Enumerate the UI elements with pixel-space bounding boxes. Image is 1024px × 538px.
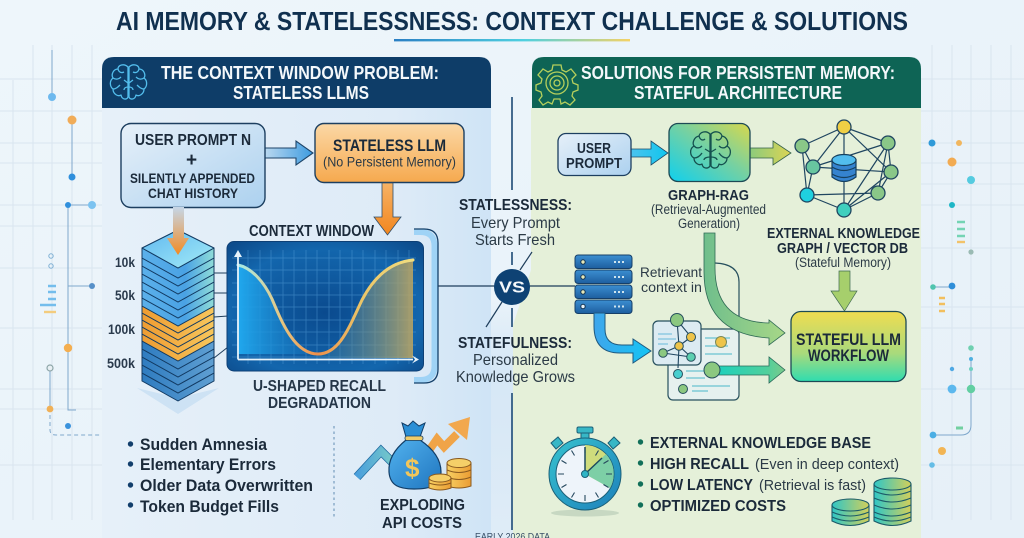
vs badge: VS	[499, 280, 525, 296]
diagram: knowledge graph	[795, 120, 898, 217]
token scale labels: 10k	[115, 255, 135, 270]
icon: database	[832, 154, 856, 182]
token scale labels: 500k	[107, 356, 135, 371]
text: statefulness	[456, 335, 575, 386]
token scale labels: 100k	[108, 322, 135, 337]
text: statelessness: Starts Fresh	[475, 232, 555, 249]
token scale labels: 50k	[115, 288, 135, 303]
box: user prompt	[558, 134, 631, 176]
box: user prompt: +	[186, 150, 197, 171]
box: stateful LLM workflow	[791, 312, 906, 382]
text: graph-rag: Generation)	[678, 216, 740, 231]
text: retrievant context: context in	[641, 279, 702, 295]
arrow: prompt to graph-rag	[631, 141, 668, 165]
heading: U-shaped recall degradation: U-SHAPED RECALL	[253, 378, 386, 395]
text: graph-rag: (Retrieval-Augmented	[651, 202, 766, 217]
arrow: graph-rag to workflow	[704, 233, 785, 345]
list: stateless symptoms: Elementary Errors	[140, 456, 276, 474]
box: user prompt	[121, 124, 265, 208]
icon: gear	[536, 65, 578, 105]
heading: U-shaped recall degradation	[253, 378, 386, 412]
box: user prompt: PROMPT	[566, 156, 622, 172]
icon: money bag and rising cost	[357, 417, 471, 490]
vs badge	[494, 269, 530, 305]
box: stateless LLM: (No Persistent Memory)	[323, 154, 456, 170]
arrow: server to documents	[594, 313, 651, 363]
text: graph-rag: GRAPH-RAG	[668, 187, 749, 204]
heading: context window: CONTEXT WINDOW	[249, 223, 374, 240]
chart: U-shaped recall	[227, 242, 424, 371]
list: stateless symptoms: Older Data Overwritten	[140, 477, 313, 495]
box: user prompt: USER PROMPT N	[135, 132, 251, 149]
arrow: prompt into token stack	[167, 207, 189, 255]
list: stateful benefits: (Even in deep context)	[755, 456, 899, 473]
icon: money bag and rising cost: $	[405, 453, 420, 483]
icon: stopwatch	[549, 427, 621, 516]
list: stateful benefits: (Retrieval is fast)	[759, 477, 866, 494]
text: retrievant context	[640, 264, 702, 295]
text: external knowledge graph	[767, 225, 920, 270]
panel header: solutions: SOLUTIONS FOR PERSISTENT MEMORY:	[581, 63, 895, 83]
box: user prompt: USER	[577, 141, 611, 157]
text: external knowledge graph: EXTERNAL KNOWLEDGE	[767, 225, 920, 242]
panel: solutions background	[513, 108, 921, 538]
list: stateless symptoms: Sudden Amnesia	[140, 436, 268, 454]
text: external knowledge graph: (Stateful Memory)	[795, 255, 891, 270]
list: stateful benefits: LOW LATENCY	[650, 477, 753, 494]
arrow: prompt to stateless LLM	[264, 141, 313, 165]
token stack	[137, 230, 219, 414]
panel header: context window problem	[102, 57, 491, 108]
icon: brain	[110, 65, 147, 99]
heading: exploding API costs: EXPLODING	[380, 497, 465, 514]
documents with retrieved graph	[653, 263, 739, 400]
connectors: stack to chart	[214, 273, 228, 358]
box: stateless LLM: STATELESS LLM	[333, 137, 446, 155]
panel header: context window problem: THE CONTEXT WINDOW PROBLEM:	[161, 63, 439, 83]
text: statefulness: Personalized	[473, 352, 558, 369]
bracket: context window	[414, 229, 438, 383]
heading: U-shaped recall degradation: DEGRADATION	[268, 395, 371, 412]
arrow: graph-rag to knowledge graph	[750, 141, 791, 165]
box: stateful LLM workflow: WORKFLOW	[808, 347, 889, 365]
list: stateful benefits: HIGH RECALL	[650, 456, 749, 473]
list: stateful benefits	[638, 435, 899, 515]
heading: exploding API costs: API COSTS	[382, 515, 462, 532]
icon: server stack	[575, 255, 632, 314]
list: stateful benefits: OPTIMIZED COSTS	[650, 498, 786, 515]
panel: context window problem background	[102, 108, 513, 538]
text: statelessness	[459, 197, 572, 249]
heading: exploding API costs	[380, 497, 465, 532]
vs connectors	[438, 252, 575, 327]
text: external knowledge graph: GRAPH / VECTOR DB	[777, 240, 908, 257]
icon: coin stacks	[832, 478, 911, 526]
box: stateless LLM	[315, 124, 464, 182]
text: statelessness: STATLESSNESS:	[459, 197, 572, 214]
title: AI MEMORY & STATELESSNESS: CONTEXT CHALLENGE & SOLUTIONS	[116, 8, 908, 36]
box: graph-rag with brain	[669, 124, 750, 182]
panel header: context window problem: STATELESS LLMS	[233, 83, 369, 103]
list: stateless symptoms	[128, 436, 313, 516]
list: stateless symptoms: Token Budget Fills	[140, 498, 279, 516]
arrow: stateless LLM to context window	[374, 183, 401, 235]
left decorative circuit	[0, 45, 102, 520]
text: graph-rag	[651, 187, 766, 231]
text: statefulness: Knowledge Grows	[456, 369, 575, 386]
box: stateful LLM workflow: STATEFUL LLM	[796, 331, 901, 349]
right decorative circuit	[921, 45, 1024, 520]
box: user prompt: SILENTLY APPENDED	[130, 171, 255, 186]
text: statelessness: Every Prompt	[471, 215, 561, 232]
arrow: knowledge graph to workflow	[831, 271, 857, 311]
text: statefulness: STATEFULNESS:	[458, 335, 572, 352]
panel header: solutions: STATEFUL ARCHITECTURE	[634, 83, 842, 103]
centre divider	[511, 97, 513, 530]
text: retrievant context: Retrievant	[640, 264, 702, 280]
box: user prompt: CHAT HISTORY	[148, 186, 238, 201]
panel header: solutions	[532, 57, 921, 108]
token scale labels	[107, 255, 135, 371]
arrow: documents to workflow	[704, 357, 785, 383]
list: stateful benefits: EXTERNAL KNOWLEDGE BASE	[650, 435, 871, 452]
